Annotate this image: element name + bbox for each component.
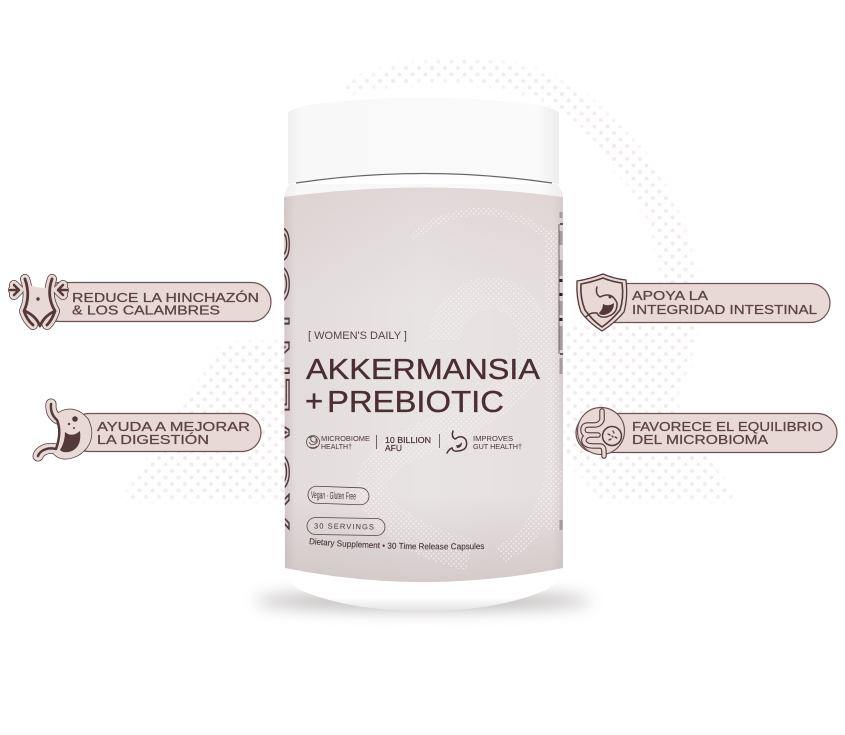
- label: AYUDA A MEJORAR: [97, 419, 250, 434]
- product name line 2: +: [305, 383, 323, 418]
- pill: [40, 282, 271, 322]
- claim: 10 billion AFU: 10 BILLION: [385, 435, 431, 445]
- claim: gut health: GUT HEALTH†: [473, 444, 522, 451]
- pill: [590, 284, 830, 322]
- label: [284, 188, 563, 582]
- badge: vegan: Vegan · Gluten Free: [311, 490, 356, 503]
- icon: waist: [10, 279, 67, 326]
- claim: microbiome health: MICROBIOME: [321, 436, 370, 443]
- benefit: bloating: [10, 279, 271, 326]
- pill: [70, 414, 261, 452]
- claim: microbiome health: HEALTH†: [321, 444, 352, 451]
- label: REDUCE LA HINCHAZÓN: [72, 290, 259, 305]
- label: DEL MICROBIOMA: [632, 432, 768, 447]
- benefit: intestinal integrity: [577, 274, 830, 331]
- benefit: microbiome balance: [576, 408, 837, 456]
- product name line 2: PREBIOTIC: [327, 384, 504, 419]
- claim: 10 billion AFU: AFU: [385, 443, 402, 453]
- icon: microbiome: [306, 436, 320, 448]
- icon: intestine: [578, 408, 624, 456]
- side label: facts: [559, 212, 564, 530]
- bottle neck: [284, 184, 563, 210]
- cap groove: [296, 174, 552, 183]
- side label: brand: XOVENTOS: [256, 226, 297, 530]
- product name line 1: AKKERMANSIA: [306, 354, 541, 386]
- label: INTEGRIDAD INTESTINAL: [632, 302, 817, 317]
- claim separators: [376, 434, 440, 449]
- product type tag: [ WOMEN'S DAILY ]: [308, 330, 407, 342]
- bottle shadow: [255, 592, 591, 610]
- bottle cap: [288, 98, 559, 184]
- background dotted swirl: [126, 60, 733, 499]
- benefit: digestion: [38, 404, 261, 456]
- badge: servings: 30 SERVINGS: [314, 521, 374, 531]
- icon: stomach: [38, 404, 87, 456]
- supplement statement: Dietary Supplement • 30 Time Release Capsules: [310, 538, 484, 552]
- badge: vegan: [308, 486, 369, 505]
- claim: gut health: IMPROVES: [473, 436, 513, 443]
- pill: [576, 414, 837, 452]
- label: FAVORECE EL EQUILIBRIO: [632, 419, 823, 434]
- label: & LOS CALAMBRES: [72, 302, 220, 318]
- icon: stomach small: [447, 431, 467, 453]
- bottle: [256, 106, 590, 620]
- label: LA DIGESTIÓN: [97, 432, 209, 447]
- label shading: [284, 188, 563, 582]
- label embossed dots: [373, 212, 555, 555]
- label: APOYA LA: [632, 288, 708, 303]
- bottle base: [285, 566, 562, 611]
- badge: servings: [307, 517, 385, 536]
- icon: shield stomach: [577, 274, 627, 331]
